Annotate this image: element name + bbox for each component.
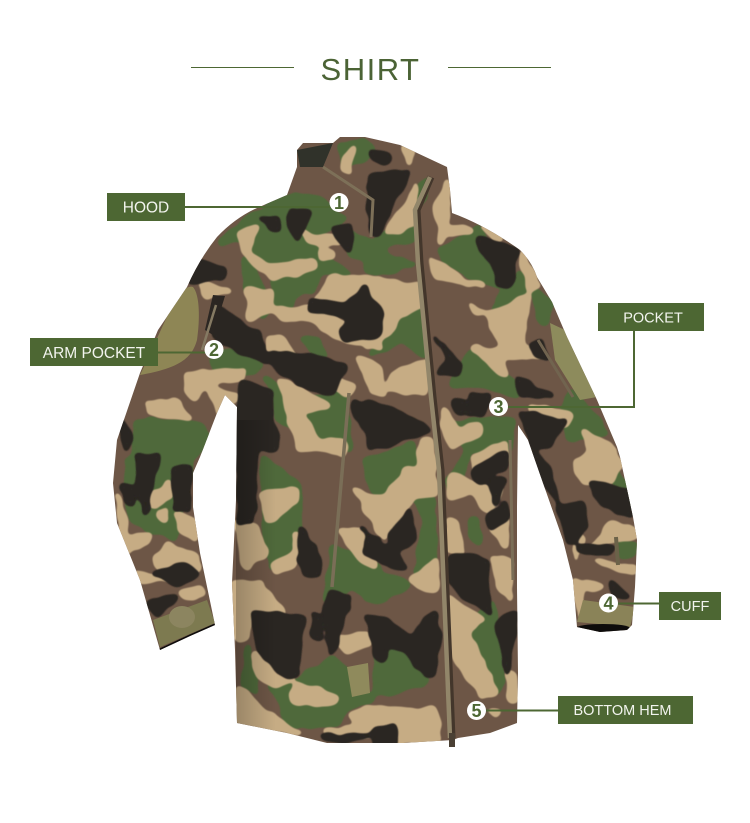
callout: cuff: 4: [603, 594, 614, 614]
right body pocket zipper: [510, 440, 513, 580]
heading text: SHIRT: [321, 52, 420, 87]
callout: pocket: POCKET: [623, 310, 683, 326]
right cuff opening: [576, 624, 630, 632]
left cuff tab: [153, 600, 215, 647]
collar zipper: [323, 167, 373, 237]
right cuff band: [577, 600, 635, 627]
callout: bottom hem: [467, 696, 693, 724]
callout: hood: HOOD: [123, 200, 169, 216]
green camo patches: [125, 140, 635, 727]
callout: arm pocket: 2: [209, 340, 219, 360]
callout: bottom hem: BOTTOM HEM: [573, 703, 672, 719]
arm patch: [140, 287, 199, 375]
left body pocket zipper: [332, 393, 349, 587]
hood inner lining: [297, 143, 333, 167]
main zipper: [415, 177, 452, 738]
arm pocket zipper: [205, 295, 225, 335]
callout: cuff: [599, 592, 721, 620]
callout: arm pocket: [30, 338, 224, 366]
side shading: [236, 420, 268, 729]
right sleeve patch: [550, 323, 597, 400]
zipper pull: [449, 733, 455, 747]
tan camo patches: [117, 146, 635, 743]
hem patch: [347, 663, 370, 697]
callout: bottom hem: 5: [471, 701, 482, 721]
camouflage jacket: [100, 130, 650, 750]
callout: pocket: 3: [493, 397, 504, 417]
callout: cuff: CUFF: [671, 599, 709, 615]
right sleeve zipper: [538, 340, 573, 397]
black camo patches: [120, 150, 633, 745]
right cuff zipper: [616, 537, 618, 565]
left cuff opening: [160, 625, 215, 650]
callout: pocket: [489, 303, 704, 417]
callout: hood: [107, 193, 348, 221]
callout: hood: 1: [334, 193, 344, 213]
callout: arm pocket: ARM POCKET: [43, 345, 146, 362]
